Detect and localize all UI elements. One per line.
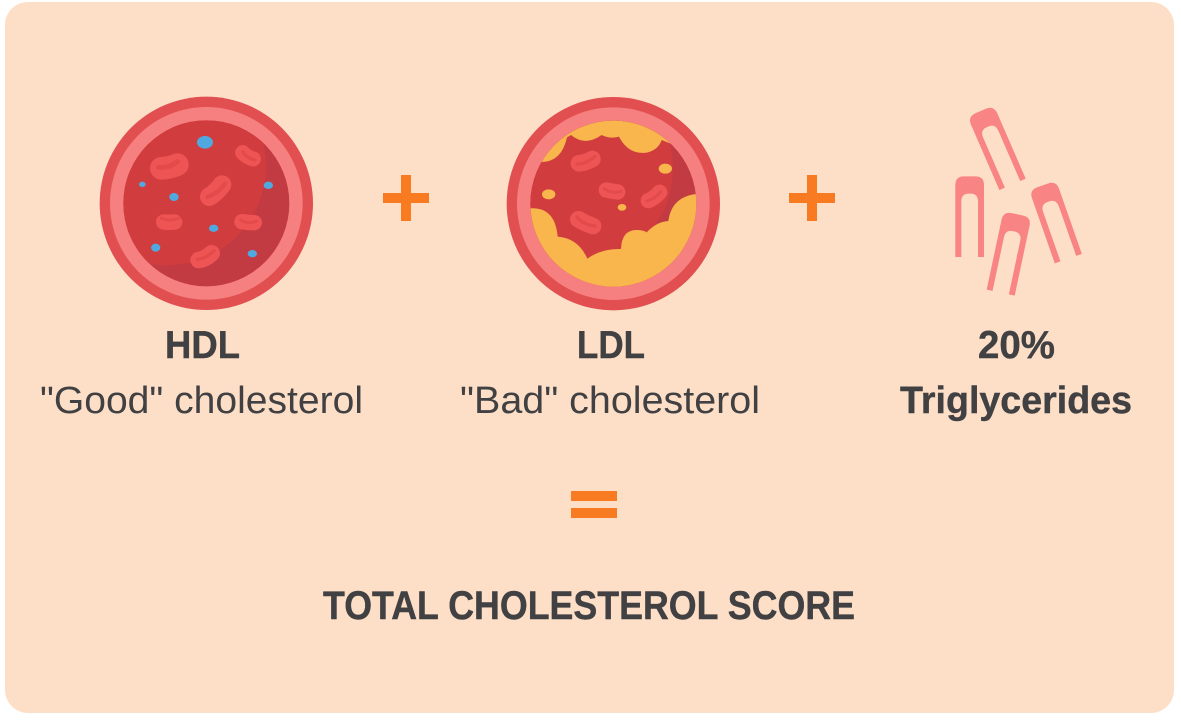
plaque deposits	[530, 120, 696, 287]
icon: HDL artery	[100, 96, 313, 310]
triglycerides percentage: 20%	[978, 324, 1055, 367]
icon: plus sign 1	[383, 175, 429, 221]
red blood cells	[577, 156, 661, 226]
LDL label: LDL	[577, 324, 645, 367]
icon: triglycerides	[955, 105, 1082, 296]
blue particles	[139, 136, 273, 257]
icon: plus sign 2	[789, 175, 835, 221]
HDL label: HDL	[165, 324, 240, 367]
icon: LDL artery	[506, 97, 720, 310]
LDL description: "Bad" cholesterol	[460, 380, 760, 422]
triglycerides label: Triglycerides	[900, 380, 1132, 422]
red blood cells	[158, 152, 257, 260]
icon: equals sign	[571, 491, 617, 518]
total score heading: TOTAL CHOLESTEROL SCORE	[323, 584, 855, 628]
HDL description: "Good" cholesterol	[40, 380, 363, 422]
